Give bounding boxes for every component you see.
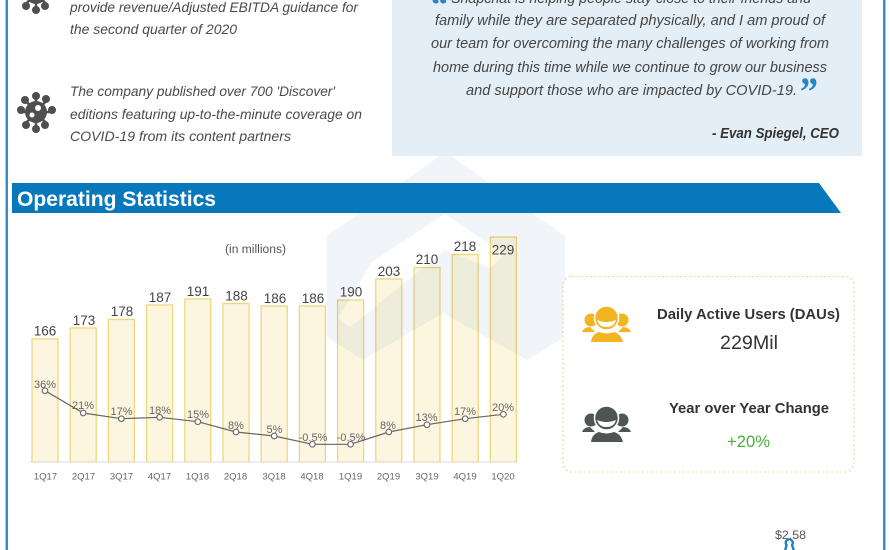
- quarter labels: 3Q18: [262, 472, 286, 482]
- bar values: 173: [73, 313, 95, 328]
- bar values: 218: [454, 239, 476, 254]
- quarter labels: 2Q19: [377, 472, 400, 482]
- growth markers: [42, 388, 506, 447]
- quote text: home during this time while we continue to grow our business: [433, 60, 827, 76]
- bar values: 190: [340, 284, 362, 300]
- quarter labels: 2Q17: [72, 472, 95, 482]
- growth labels: 18%: [149, 405, 171, 417]
- quarter labels: 4Q17: [148, 472, 171, 482]
- quarter labels: 1Q17: [34, 472, 57, 482]
- growth labels: -0.5%: [337, 432, 366, 444]
- guidance text: the second quarter of 2020: [70, 21, 237, 37]
- icon: yellow users: [582, 306, 631, 342]
- bullet: Discover editions: [17, 83, 366, 144]
- bar values: 210: [416, 252, 438, 267]
- DAU label: Daily Active Users (DAUs): [657, 306, 840, 323]
- Discover text: The company published over 700 'Discover': [70, 83, 336, 99]
- bar values: 186: [264, 291, 286, 306]
- chart unit note: (in millions): [225, 244, 286, 256]
- growth labels: 8%: [228, 420, 244, 432]
- Discover text: COVID-19 from its content partners: [70, 128, 291, 144]
- bar values: [34, 239, 514, 338]
- quote text: our team for overcoming the many challenges of working from: [431, 36, 829, 52]
- Discover text: editions featuring up-to-the-minute coverage on: [70, 106, 362, 122]
- bar values: 229: [492, 242, 514, 258]
- quarter labels: 1Q19: [339, 472, 362, 482]
- bar values: 166: [34, 324, 56, 338]
- growth labels: 5%: [267, 424, 283, 436]
- bar values: 191: [187, 284, 209, 299]
- growth labels: 13%: [415, 412, 438, 424]
- quarter labels: 4Q19: [453, 472, 477, 482]
- heading: Operating Statistics: [12, 183, 841, 213]
- chart: daily active users by quarter: [30, 237, 518, 482]
- growth labels: 21%: [72, 400, 94, 412]
- growth labels: -0.5%: [299, 432, 328, 444]
- growth labels: 8%: [380, 420, 396, 432]
- bar values: 203: [378, 264, 400, 279]
- quarter labels: 3Q19: [415, 472, 439, 482]
- growth labels: [34, 379, 514, 444]
- DAU value: 229Mil: [720, 333, 778, 354]
- bar values: 186: [302, 291, 324, 306]
- icon: grey users: [582, 406, 631, 442]
- next chart fragment: [775, 530, 806, 550]
- icon: virus: [17, 92, 56, 133]
- quarter labels: 4Q18: [300, 472, 324, 482]
- data label: $2.58: [775, 530, 806, 542]
- quote text: and support those who are impacted by COVID-19.: [466, 83, 797, 99]
- bar values: 188: [225, 288, 248, 304]
- panel: CEO quote: [392, 0, 862, 156]
- growth line: [45, 391, 503, 444]
- YoY label: Year over Year Change: [669, 400, 829, 417]
- panel: DAU summary: [563, 276, 854, 472]
- quarter labels: 2Q18: [224, 472, 247, 482]
- quarter labels: 3Q17: [110, 472, 133, 482]
- growth labels: 36%: [34, 379, 56, 391]
- growth labels: 17%: [110, 406, 133, 418]
- icon: virus: [17, 0, 56, 14]
- growth labels: 20%: [492, 402, 514, 414]
- bullet: guidance: [17, 0, 362, 37]
- bars: [32, 237, 516, 462]
- attribution: - Evan Spiegel, CEO: [712, 126, 840, 142]
- quarter labels: 1Q20: [491, 472, 515, 482]
- YoY value: +20%: [727, 432, 770, 451]
- marker: [785, 539, 794, 550]
- quarter labels: 1Q18: [186, 472, 209, 482]
- quarter labels: [34, 472, 515, 482]
- quote text: family while they are separated physically, and I am proud of: [435, 13, 827, 29]
- bar values: 178: [111, 304, 133, 319]
- closing quote mark: ”: [800, 69, 818, 114]
- watermark logo: [327, 152, 565, 360]
- growth labels: 17%: [454, 406, 476, 418]
- bar values: 187: [149, 290, 171, 305]
- heading: Operating Statistics: Operating Statistics: [17, 187, 216, 211]
- axis line: [30, 461, 518, 463]
- growth labels: 15%: [187, 409, 209, 421]
